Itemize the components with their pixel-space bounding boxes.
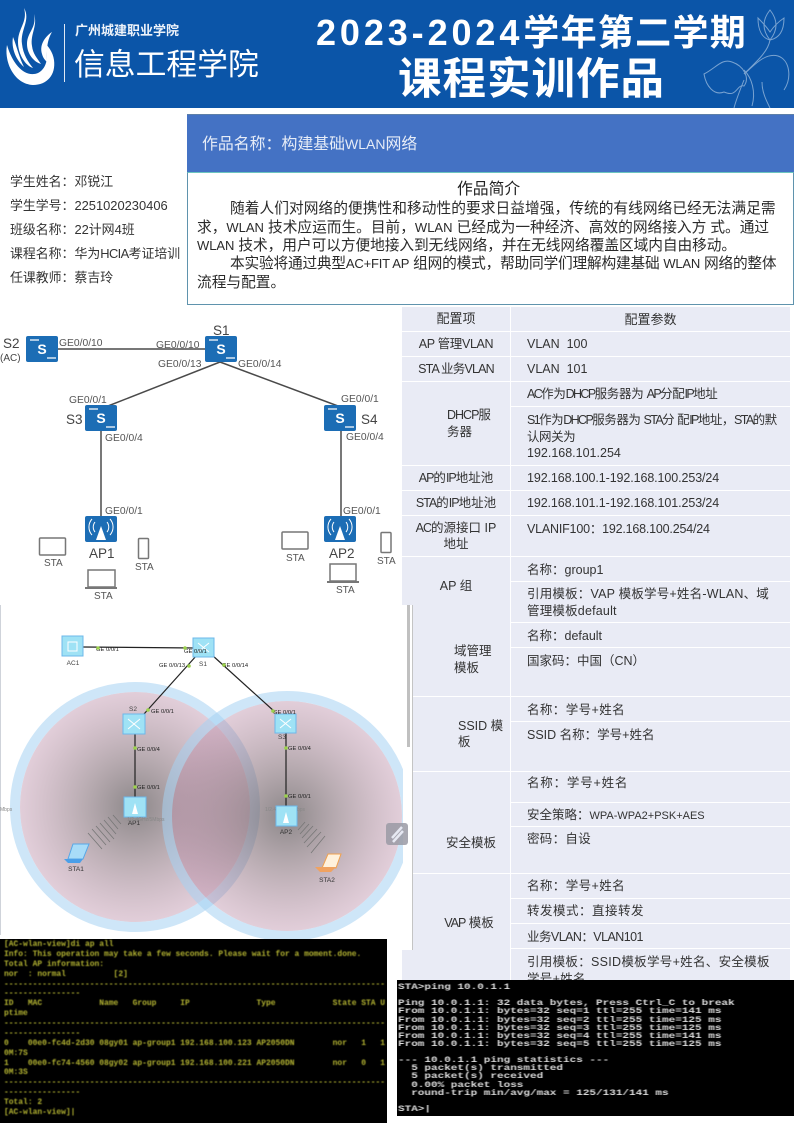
project name bar xyxy=(187,114,794,173)
STA terminals of AP2: STA xyxy=(286,553,305,564)
wireless simulation topology screenshot xyxy=(0,605,413,950)
configuration table: 务器 xyxy=(447,424,472,438)
interface labels: GE 0/0/1 xyxy=(151,709,174,715)
STA terminals of AP1: STA xyxy=(44,558,63,569)
AP1 device xyxy=(124,797,146,827)
row: security template xyxy=(413,772,790,873)
S1 device xyxy=(193,638,214,668)
S3 device xyxy=(275,714,296,741)
switch S1: S xyxy=(216,341,226,357)
STA terminals of AP2 xyxy=(282,532,396,596)
switch S2 xyxy=(26,336,58,362)
switch S2: S xyxy=(37,341,47,357)
interface labels: GE0/0/1 xyxy=(343,506,381,517)
teacher: 任课教师：蔡吉玲 xyxy=(10,270,113,285)
device labels: S3 xyxy=(66,412,83,427)
configuration table: SSID 模 xyxy=(458,718,503,732)
device labels: S4 xyxy=(361,412,378,427)
switch S3 xyxy=(85,405,117,431)
S2 device: S2 xyxy=(129,706,137,713)
AP1 device: AP1 xyxy=(128,820,141,827)
interface labels: GE0/0/4 xyxy=(105,433,143,444)
laptop STA2 xyxy=(315,854,341,884)
row: AP management VLAN xyxy=(402,332,790,356)
table header: 配置项 xyxy=(436,311,476,326)
table header xyxy=(402,307,790,331)
STA terminals of AP2: STA xyxy=(336,585,355,596)
interface labels: GE 0/0/4 xyxy=(288,746,312,752)
configuration table: AC作为DHCP服务器为 AP分配IP地址 xyxy=(527,387,718,401)
topology links xyxy=(58,349,341,516)
row: STA IP pool xyxy=(402,491,790,515)
configuration table: 名称：学号+姓名 xyxy=(527,879,625,893)
interface labels: GE0/0/1 xyxy=(341,394,379,405)
S3 device: S3 xyxy=(278,734,286,741)
signal waves to STA2 xyxy=(298,822,325,853)
student name: 学生姓名：邓锐江 xyxy=(10,174,113,189)
S1 device: S1 xyxy=(199,661,207,668)
floating tool button xyxy=(386,823,408,845)
interface labels: GE0/0/14 xyxy=(238,359,282,370)
interface labels: GE0/0/1 xyxy=(69,395,107,406)
AP2 device xyxy=(276,806,297,836)
faint rate labels: bps xyxy=(297,807,306,813)
configuration table: AC的源接口 IP xyxy=(416,520,496,534)
configuration table: 地址 xyxy=(443,537,468,551)
device labels: S1 xyxy=(213,323,230,338)
interface labels: GE0/0/1 xyxy=(105,506,143,517)
S2 device xyxy=(123,706,145,734)
row: SSID template xyxy=(413,697,790,771)
configuration table: 名称：group1 xyxy=(527,563,603,577)
intro body text: 随着人们对网络的便携性和移动性的要求日益增强，传统的有线网络已经无法满足需 xyxy=(230,201,776,217)
configuration table: VLAN 100 xyxy=(527,337,587,351)
interface labels: GE0/0/4 xyxy=(346,432,384,443)
intro body text: WLAN 技术，用户可以方便地接入到无线网络，并在无线网络覆盖区域内自由移动。 xyxy=(197,238,736,254)
logo divider xyxy=(64,24,65,82)
student number: 学生学号：2251020230406 xyxy=(10,198,168,213)
switch S1 xyxy=(205,336,237,362)
configuration table: 192.168.101.1-192.168.101.253/24 xyxy=(527,496,719,510)
row: VAP template xyxy=(402,874,790,986)
configuration table: 引用模板：SSID模板学号+姓名、安全模板 xyxy=(527,955,770,969)
interface labels xyxy=(59,338,384,517)
configuration table: 安全策略：WPA-WPA2+PSK+AES xyxy=(527,808,705,822)
row: STA service VLAN xyxy=(402,357,790,381)
course name: 课程名称：华为HCIA考证培训 xyxy=(10,246,180,261)
device labels xyxy=(0,323,378,561)
configuration table: VAP 模板 xyxy=(444,916,494,930)
configuration table: STA的IP地址池 xyxy=(416,496,496,510)
interface labels: GE0/0/10 xyxy=(156,340,200,351)
configuration table: VLAN 101 xyxy=(527,362,587,376)
laptop STA1: STA1 xyxy=(68,866,84,873)
intro body text xyxy=(197,200,776,291)
configuration table: 模板 xyxy=(454,660,479,674)
configuration table: 名称：学号+姓名 xyxy=(527,703,625,717)
STA terminals of AP1: STA xyxy=(135,562,154,573)
configuration table: 密码：自设 xyxy=(527,832,591,846)
project name text: 作品名称：构建基础WLAN网络 xyxy=(202,136,417,153)
network topology diagram xyxy=(0,323,396,602)
device labels: AP1 xyxy=(89,546,115,561)
configuration table: 名称：default xyxy=(527,629,602,643)
configuration table: 域管理 xyxy=(454,644,492,658)
interface labels: GE0/0/13 xyxy=(158,359,202,370)
laptop STA1 xyxy=(64,844,89,873)
interface labels: GE 0/0/1 xyxy=(273,710,296,716)
configuration table: S1作为DHCP服务器为 STA分 配IP地址，STA的默 xyxy=(527,413,777,427)
header banner xyxy=(0,0,794,108)
configuration table: 名称：学号+姓名 xyxy=(527,776,628,790)
configuration table: 192.168.100.1-192.168.100.253/24 xyxy=(527,471,719,485)
row: AP IP pool xyxy=(402,466,790,490)
links xyxy=(83,647,286,806)
configuration table: DHCP服 xyxy=(447,408,491,422)
icon: college flame logo xyxy=(6,8,54,85)
faint rate labels xyxy=(0,807,306,823)
access point AP1 xyxy=(85,516,117,542)
device labels: AP2 xyxy=(329,546,355,561)
STA terminals of AP2: STA xyxy=(377,556,396,567)
configuration table: SSID 名称：学号+姓名 xyxy=(527,728,654,742)
intro body text: 求，WLAN 技术应运而生。目前，WLAN 已经成为一种经济、高效的网络接入方 式。通过 xyxy=(197,220,769,236)
switch S3: S xyxy=(96,410,106,426)
device labels: (AC) xyxy=(0,353,21,364)
configuration table: AP 组 xyxy=(440,579,472,593)
title line 2: 课程实训作品 xyxy=(398,56,665,104)
STA terminals of AP1: STA xyxy=(94,591,113,602)
configuration table: AP的IP地址池 xyxy=(419,471,493,485)
intro body text: 流程与配置。 xyxy=(197,275,285,291)
table header: 配置参数 xyxy=(624,312,676,327)
ping terminal screenshot xyxy=(397,980,794,1116)
row: AC source interface xyxy=(402,516,790,556)
row: DHCP server xyxy=(402,382,790,465)
configuration table: 国家码：中国（CN） xyxy=(527,654,645,668)
faint rate labels: 1/2.4 xyxy=(265,807,276,813)
switch S4: S xyxy=(335,410,345,426)
school name: 信息工程学院 xyxy=(74,47,259,82)
interface labels: GE0/0/10 xyxy=(59,338,103,349)
AP2 device: AP2 xyxy=(280,829,293,836)
connection points xyxy=(96,646,288,798)
project intro panel xyxy=(187,172,794,305)
configuration table: STA 业务VLAN xyxy=(418,362,494,376)
signal waves to STA1 xyxy=(88,815,121,849)
icon: lotus line art xyxy=(704,9,790,108)
configuration table: 板 xyxy=(458,735,471,749)
configuration table: 192.168.101.254 xyxy=(527,446,621,460)
configuration table: AP 管理VLAN xyxy=(419,337,493,351)
wireless coverage circles xyxy=(15,687,407,936)
interface labels: GE 0/0/4 xyxy=(137,747,161,753)
AC1 device: AC1 xyxy=(67,660,80,667)
configuration table: 管理模板default xyxy=(527,604,617,618)
intro body text: 本实验将通过典型AC+FIT AP 组网的模式，帮助同学们理解构建基础 WLAN 网络的整体 xyxy=(230,256,776,272)
access point AP2 xyxy=(324,516,356,542)
row: AP group xyxy=(402,557,790,623)
interface labels: GE 0/0/14 xyxy=(222,663,249,669)
panel edges and scrollbar xyxy=(0,605,412,950)
student info block xyxy=(10,174,180,285)
interface labels: GE 0/0/1 xyxy=(96,647,119,653)
interface labels xyxy=(96,647,312,800)
ping output: STA>ping 10.0.1.1 Ping 10.0.1.1: 32 data bytes, Press Ctrl_C to break From 10.0.1.1: bytes=32 seq=1 ttl=255 time=141 ms From 10.0.1.1: bytes=32 seq=2 ttl=255 time=125 ms From 10.0.1.1: bytes=32 seq=3 ttl=255 time=125 ms From 10.0.1.1: bytes=32 seq=4 ttl=255 time=141 ms From 10.0.1.1: bytes=32 seq=5 ttl=255 time=125 ms --- 10.0.1.1 ping statistics --- 5 packet(s) transmitted 5 packet(s) received 0.00% packet loss round-trip min/avg/max = 125/131/141 ms STA>| xyxy=(398,982,735,1114)
title line 1: 2023-2024学年第二学期 xyxy=(316,12,747,53)
AC1 device xyxy=(62,636,83,667)
laptop STA2: STA2 xyxy=(319,877,335,884)
configuration table: 转发模式：直接转发 xyxy=(527,904,644,918)
panel background xyxy=(0,605,412,950)
row: domain template xyxy=(413,623,790,696)
intro heading: 作品简介 xyxy=(457,180,520,198)
faint rate labels: Mbps xyxy=(0,807,13,813)
AP status output: [AC-wlan-view]di ap all Info: This operation may take a few seconds. Please wait for a moment.done. Total AP information: nor : normal [2] -------------------------------------------------------------------------------- ---------------- ID MAC Name Group IP Type State STA U ptime -------------------------------------------------------------------------------- ---------------- 0 00e0-fc4d-2d30 08gy01 ap-group1 192.168.100.123 AP2050DN nor 1 1 0M:7S 1 00e0-fc74-4560 08gy02 ap-group1 192.168.100.221 AP2050DN nor 0 1 0M:3S -------------------------------------------------------------------------------- ---------------- Total: 2 [AC-wlan-view]| xyxy=(4,940,385,1117)
interface labels: GE 0/0/1 xyxy=(288,794,311,800)
device labels: S2 xyxy=(3,336,20,351)
configuration table: 认网关为 xyxy=(527,430,575,444)
interface labels: GE 0/0/1 xyxy=(184,649,207,655)
STA terminals of AP1 xyxy=(40,538,154,602)
faint rate labels: 1/2.4GHz/5Mbps xyxy=(127,817,165,823)
interface labels: GE 0/0/13 xyxy=(159,663,185,669)
AP status terminal screenshot xyxy=(0,939,387,1123)
configuration table: 业务VLAN：VLAN101 xyxy=(527,930,643,944)
interface labels: GE 0/0/1 xyxy=(137,785,160,791)
configuration table: 安全模板 xyxy=(446,836,496,850)
configuration table: 引用模板：VAP 模板学号+姓名-WLAN、域 xyxy=(527,587,769,601)
college name small: 广州城建职业学院 xyxy=(75,23,179,38)
switch S4 xyxy=(324,405,356,431)
configuration table: VLANIF100：192.168.100.254/24 xyxy=(527,522,710,536)
configuration table: 学号+姓名 xyxy=(527,972,586,986)
class name: 班级名称：22计网4班 xyxy=(10,222,135,237)
